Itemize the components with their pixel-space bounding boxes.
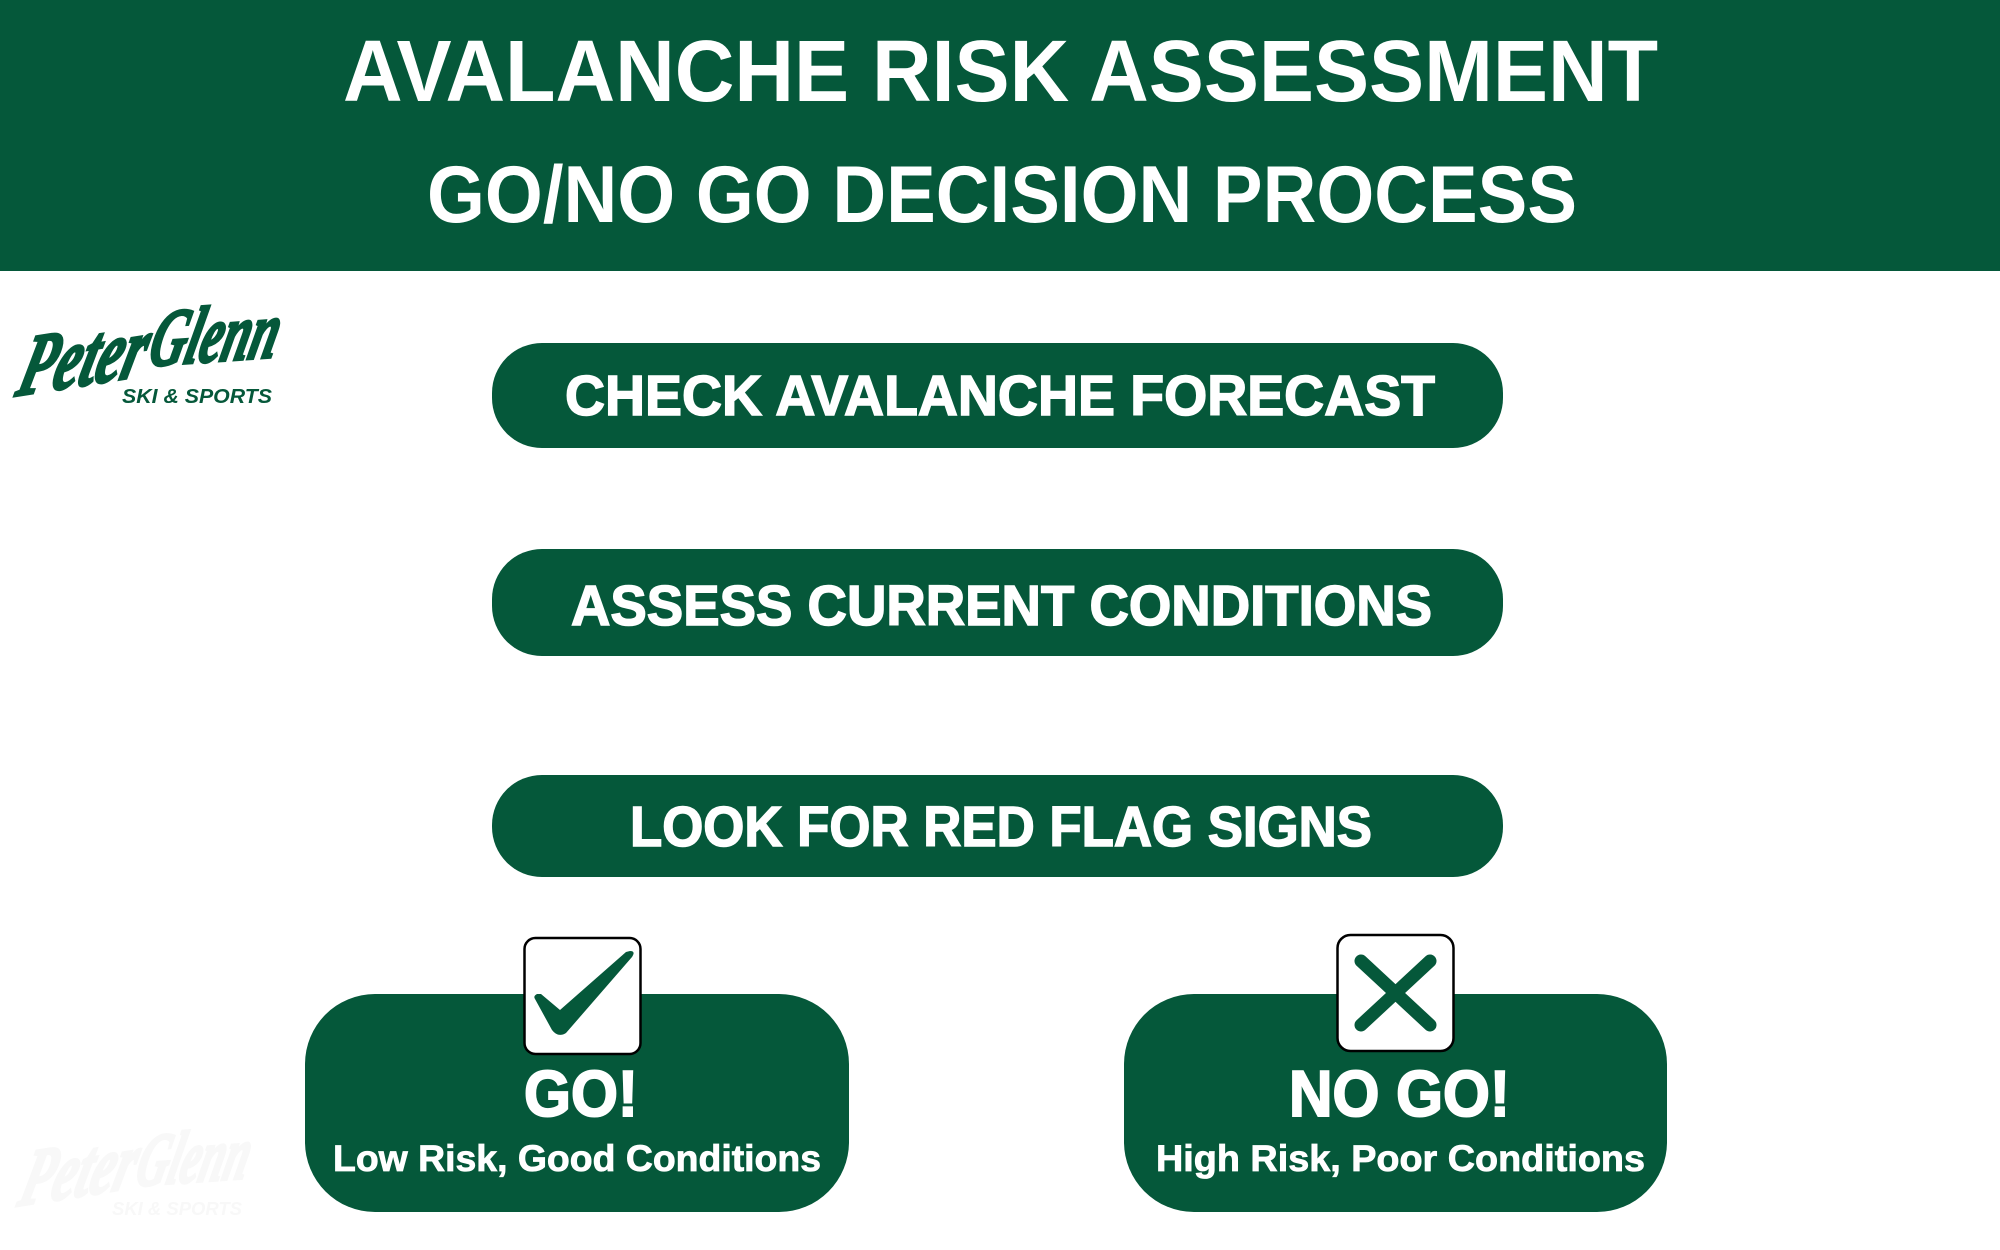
step 1 pill <box>492 343 1503 448</box>
step 3 pill <box>492 775 1503 877</box>
logo: Peter Glenn: Peter <box>8 298 162 416</box>
step 2 pill: ASSESS CURRENT CONDITIONS <box>571 574 1432 638</box>
panel: no go <box>1124 994 1667 1212</box>
header band <box>0 0 2000 271</box>
no go description: High Risk, Poor Conditions <box>1156 1138 1645 1179</box>
step 1 pill: CHECK AVALANCHE FORECAST <box>565 364 1435 428</box>
go description: Low Risk, Good Conditions <box>333 1138 821 1179</box>
subtitle: GO/NO GO DECISION PROCESS <box>427 150 1577 240</box>
logo: Peter Glenn: Glenn <box>142 284 292 384</box>
logo: Peter Glenn: SKI & SPORTS <box>122 386 273 408</box>
faint watermark logo: Glenn <box>129 1112 261 1203</box>
panel: go <box>305 994 849 1212</box>
step 3 pill: LOOK FOR RED FLAG SIGNS <box>630 795 1372 859</box>
faint watermark logo: SKI & SPORTS <box>112 1199 242 1219</box>
title: AVALANCHE RISK ASSESSMENT <box>343 23 1658 120</box>
icon: check mark <box>524 938 640 1054</box>
faint watermark logo: Peter <box>10 1114 151 1224</box>
icon: cross mark <box>1338 935 1454 1051</box>
logo: Peter Glenn <box>8 284 292 416</box>
no go heading: NO GO! <box>1289 1057 1510 1130</box>
go heading: GO! <box>524 1057 638 1130</box>
step 2 pill <box>492 549 1503 656</box>
